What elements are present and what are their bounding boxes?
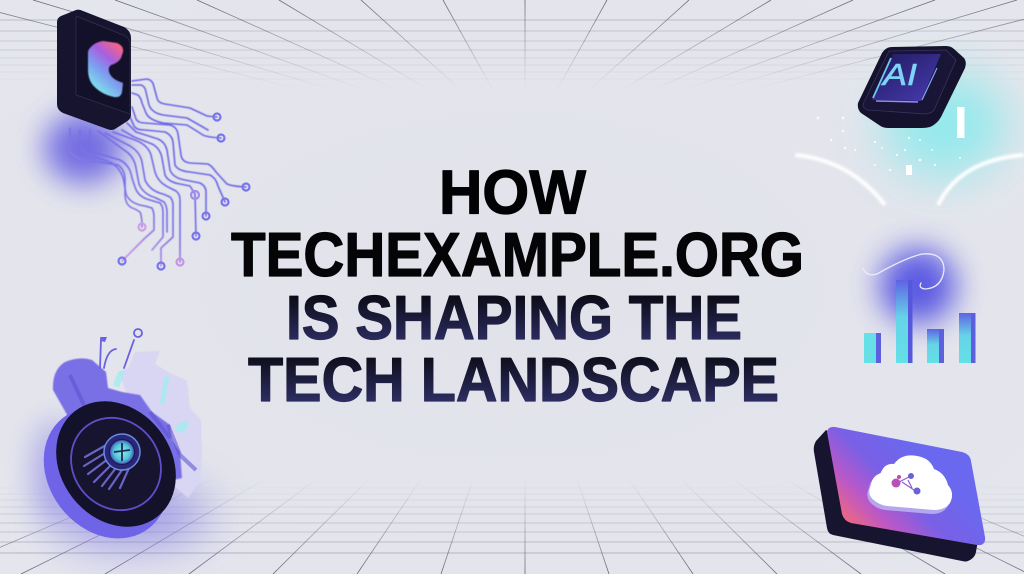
cloud network glyph bbox=[892, 473, 920, 494]
top perspective grid bbox=[0, 0, 1024, 92]
hub blades bbox=[114, 443, 130, 461]
bar 3 bbox=[927, 329, 944, 363]
purple splash bbox=[53, 358, 182, 482]
inner ring bbox=[53, 400, 179, 528]
back disc bbox=[18, 383, 194, 563]
icon: phone tile with circuit traces bbox=[44, 10, 250, 270]
icon: lens disc with splash bbox=[18, 329, 208, 563]
splash darker strokes bbox=[70, 375, 196, 470]
swirl bbox=[863, 254, 944, 289]
bar 1 bbox=[864, 333, 881, 363]
pale splash bbox=[118, 351, 202, 498]
card face bbox=[827, 427, 985, 545]
title bbox=[231, 158, 804, 415]
title line 1: HOW bbox=[439, 158, 586, 228]
pins bbox=[100, 329, 142, 368]
black disc bbox=[31, 377, 201, 551]
sparkle dots bbox=[817, 117, 961, 171]
circuit traces bbox=[70, 79, 246, 266]
chip body bbox=[858, 46, 966, 128]
AI label: AI bbox=[881, 57, 917, 92]
purple glow bbox=[44, 112, 124, 184]
bar 4 bbox=[959, 313, 976, 363]
icon: bar chart with glow bbox=[863, 248, 976, 363]
purple glow bbox=[880, 248, 956, 324]
phone glyph bbox=[88, 41, 123, 97]
left glow bbox=[33, 420, 77, 520]
title line 2: TECHEXAMPLE.ORG bbox=[231, 221, 804, 290]
hub centre bbox=[110, 440, 134, 464]
bar 2 bbox=[896, 280, 912, 363]
cyan glow bbox=[883, 73, 1007, 177]
chip outline bbox=[863, 50, 956, 114]
light sweep right bbox=[938, 155, 1024, 205]
trace end nodes bbox=[118, 114, 250, 270]
card side bbox=[814, 430, 978, 562]
icon: AI chip with cyan glow bbox=[795, 46, 1024, 205]
bottom perspective grid bbox=[0, 476, 1024, 574]
light sweep left bbox=[795, 155, 885, 205]
splash cyan flecks bbox=[113, 370, 190, 433]
title line 3: IS SHAPING THE bbox=[286, 284, 742, 353]
fins bbox=[84, 444, 129, 489]
icon: cloud card bbox=[814, 427, 985, 562]
lower glow bbox=[52, 485, 208, 545]
white bar large bbox=[957, 107, 964, 138]
cloud bbox=[869, 455, 952, 510]
cloud shadow bbox=[867, 458, 950, 514]
white bar small bbox=[906, 165, 912, 175]
hub bbox=[104, 434, 140, 470]
tile inset outline bbox=[76, 16, 130, 114]
pin cap bbox=[100, 337, 107, 342]
title line 4: TECH LANDSCAPE bbox=[248, 346, 779, 415]
tile body bbox=[57, 10, 131, 130]
screen edge lights bbox=[873, 58, 891, 98]
chip screen bbox=[872, 54, 941, 101]
